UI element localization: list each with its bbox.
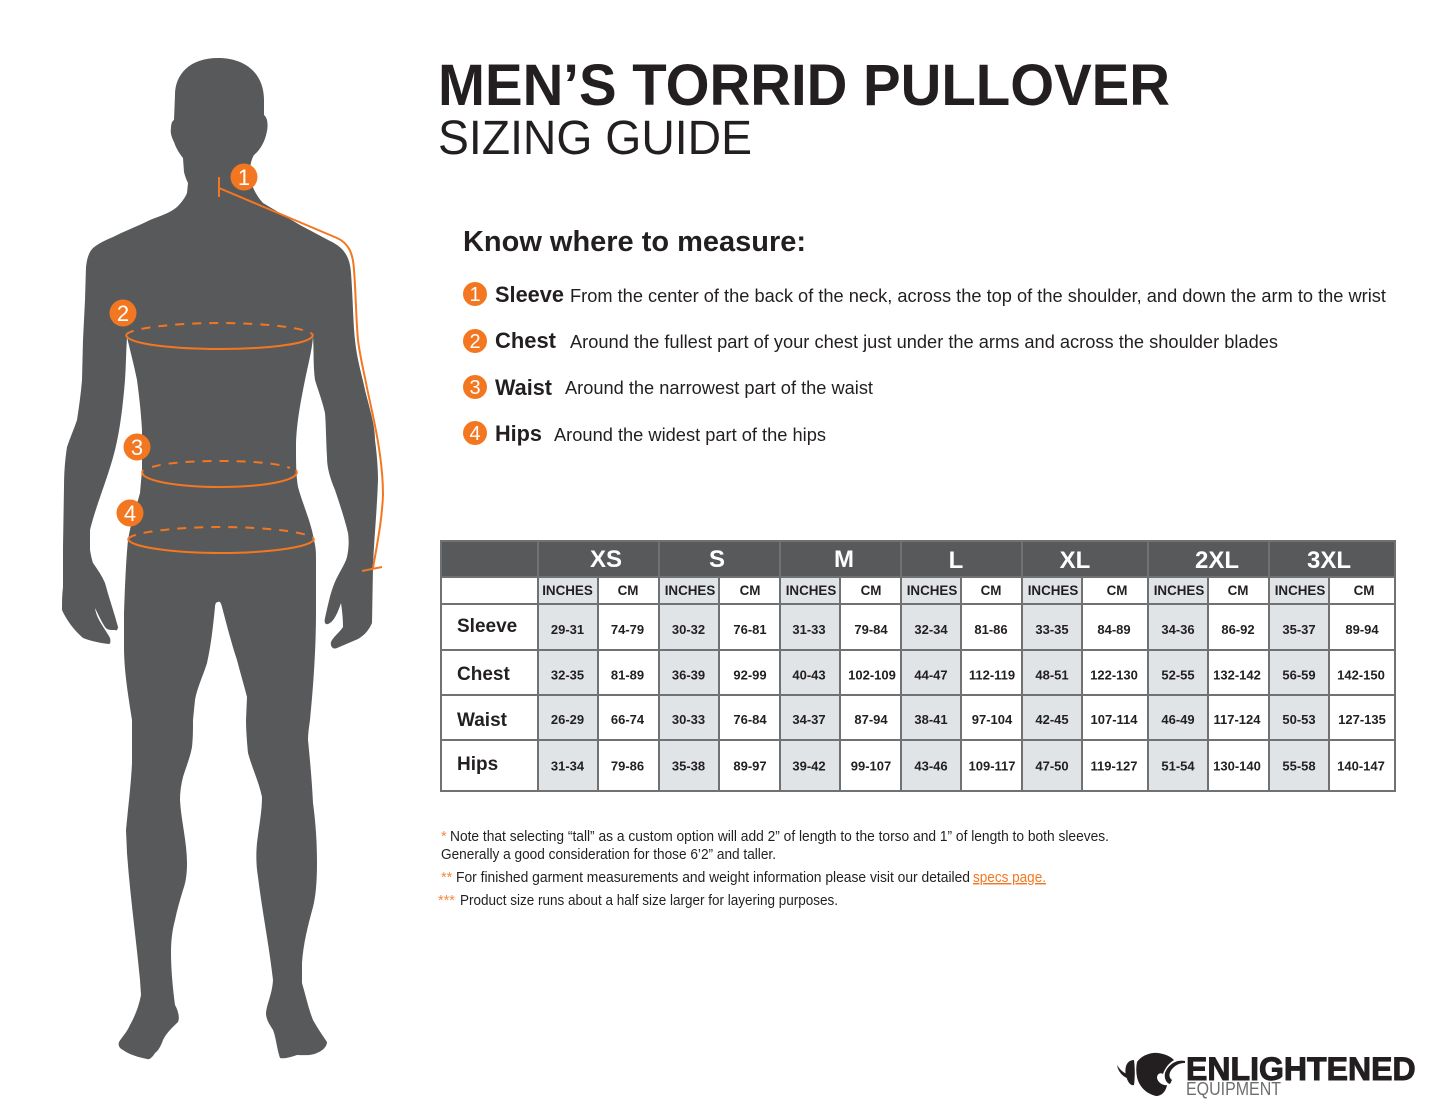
row: sleeve: 76-81 bbox=[733, 622, 767, 637]
size labels: L bbox=[949, 547, 963, 574]
row: sleeve: 86-92 bbox=[1221, 622, 1255, 637]
badge 4 on figure: 4 bbox=[124, 501, 136, 526]
row: hips: 43-46 bbox=[914, 758, 948, 774]
item: hips: 4 bbox=[469, 423, 481, 445]
row: hips: 89-97 bbox=[733, 758, 767, 774]
item: chest: 2 bbox=[469, 331, 481, 353]
badge 2 on figure: 2 bbox=[117, 301, 129, 326]
item: chest: Chest bbox=[495, 328, 556, 353]
item: sleeve: Sleeve bbox=[495, 282, 564, 307]
row: chest: 102-109 bbox=[848, 668, 896, 682]
footnote: product size: Product size runs about a half size larger for layering purposes. bbox=[460, 893, 838, 909]
row: sleeve: 31-33 bbox=[792, 622, 826, 637]
row: sleeve: 32-34 bbox=[914, 622, 948, 637]
row: chest: Chest bbox=[457, 664, 510, 685]
measurement line: chest bbox=[126, 323, 313, 349]
row: waist: 46-49 bbox=[1161, 712, 1195, 727]
row: hips bbox=[457, 754, 1385, 775]
row: sleeve: 81-86 bbox=[974, 622, 1008, 637]
measurement line: sleeve bbox=[219, 177, 383, 571]
footnote: tall option: Note that selecting “tall” as a custom option will add 2” of length to the torso and 1” of length to both sleeves. bbox=[450, 829, 1109, 845]
size labels: 2XL bbox=[1195, 547, 1239, 574]
row: sleeve: 89-94 bbox=[1345, 622, 1379, 637]
unit labels: INCHES bbox=[542, 583, 593, 598]
row: waist: 34-37 bbox=[792, 712, 826, 727]
size labels: XS bbox=[590, 546, 622, 573]
footnotes bbox=[438, 829, 1109, 909]
unit labels: INCHES bbox=[907, 583, 957, 598]
unit labels: INCHES bbox=[1275, 583, 1325, 598]
size chart table bbox=[440, 540, 1396, 791]
row: hips: 51-54 bbox=[1161, 758, 1195, 774]
unit labels: CM bbox=[1107, 583, 1127, 598]
size labels bbox=[590, 546, 1351, 574]
row: chest: 56-59 bbox=[1282, 668, 1316, 682]
row: chest: 142-150 bbox=[1337, 668, 1385, 682]
size labels: 3XL bbox=[1307, 547, 1351, 574]
item: waist: Waist bbox=[495, 375, 552, 400]
row: chest: 40-43 bbox=[792, 668, 826, 682]
footnote: specs page: ** bbox=[441, 870, 453, 886]
unit labels: CM bbox=[740, 583, 760, 598]
row: hips: 119-127 bbox=[1090, 758, 1138, 774]
size labels: M bbox=[834, 546, 854, 573]
row: hips: 31-34 bbox=[551, 758, 585, 774]
row: hips: 140-147 bbox=[1337, 758, 1385, 774]
item: chest: Around the fullest part of your chest just under the arms and across the shoulder blades bbox=[570, 331, 1278, 352]
row: waist: 76-84 bbox=[733, 712, 767, 727]
footnote: tall option: * bbox=[441, 829, 447, 845]
unit labels: INCHES bbox=[1028, 583, 1078, 598]
row: chest: 36-39 bbox=[672, 668, 705, 682]
row: chest: 52-55 bbox=[1161, 668, 1195, 682]
row: chest: 48-51 bbox=[1035, 668, 1069, 682]
badge 1 on figure: 1 bbox=[238, 165, 250, 190]
badge 3 on figure bbox=[124, 434, 150, 460]
row: hips: 35-38 bbox=[672, 758, 705, 774]
row: hips: 109-117 bbox=[968, 758, 1016, 774]
item: hips bbox=[463, 421, 826, 446]
row: waist: 38-41 bbox=[914, 712, 948, 727]
unit labels: CM bbox=[618, 583, 638, 598]
row: sleeve: Sleeve bbox=[457, 616, 517, 637]
footnote: specs page: specs page. bbox=[973, 870, 1046, 886]
item: waist: 3 bbox=[469, 377, 481, 399]
badge 3 on figure: 3 bbox=[131, 435, 143, 460]
row: sleeve: 29-31 bbox=[551, 622, 584, 637]
row: hips: 47-50 bbox=[1035, 758, 1069, 774]
logo: Enlightened Equipment bbox=[1117, 1051, 1416, 1099]
icon: bull head bbox=[1117, 1053, 1185, 1096]
row: waist bbox=[457, 710, 1386, 731]
row: hips: 130-140 bbox=[1213, 758, 1261, 774]
row: waist: 87-94 bbox=[854, 712, 888, 727]
row: waist: 97-104 bbox=[972, 712, 1013, 727]
row: chest: 81-89 bbox=[611, 668, 644, 682]
footnote: product size: *** bbox=[438, 893, 455, 909]
row: waist: 30-33 bbox=[672, 712, 705, 727]
row: sleeve: 34-36 bbox=[1161, 622, 1195, 637]
row: waist: 26-29 bbox=[551, 712, 584, 727]
badge 2 on figure bbox=[110, 300, 136, 326]
row: waist: 127-135 bbox=[1338, 712, 1386, 727]
item: waist bbox=[463, 375, 873, 400]
row: chest: 132-142 bbox=[1213, 668, 1261, 682]
measurement list bbox=[463, 282, 1386, 446]
body figure diagram bbox=[62, 58, 383, 1059]
row: sleeve: 84-89 bbox=[1097, 622, 1131, 637]
unit labels: INCHES bbox=[1154, 583, 1204, 598]
badge 1 on figure bbox=[230, 164, 258, 190]
row: chest: 92-99 bbox=[733, 668, 767, 682]
row: hips: 55-58 bbox=[1282, 758, 1316, 774]
row: hips: 39-42 bbox=[792, 758, 826, 774]
item: waist: Around the narrowest part of the waist bbox=[565, 377, 873, 398]
row: sleeve: 33-35 bbox=[1035, 622, 1069, 637]
row: sleeve: 79-84 bbox=[854, 622, 888, 637]
measurement line: waist bbox=[142, 461, 297, 487]
tagline: EQUIPMENT bbox=[1186, 1079, 1281, 1099]
footnote: tall option bbox=[441, 829, 1109, 863]
row: chest: 44-47 bbox=[914, 668, 948, 682]
size labels: XL bbox=[1060, 547, 1090, 574]
unit labels: CM bbox=[861, 583, 881, 598]
unit labels: INCHES bbox=[665, 583, 715, 598]
row: waist: 117-124 bbox=[1214, 712, 1261, 727]
row: hips: Hips bbox=[457, 754, 498, 775]
unit labels bbox=[542, 583, 1374, 598]
unit labels: CM bbox=[981, 583, 1001, 598]
item: hips: Around the widest part of the hips bbox=[554, 424, 826, 445]
row: sleeve: 74-79 bbox=[611, 622, 644, 637]
row: chest: 112-119 bbox=[969, 668, 1015, 682]
unit labels: INCHES bbox=[786, 583, 836, 598]
item: hips: Hips bbox=[495, 421, 542, 446]
badge 4 on figure bbox=[116, 500, 144, 526]
row: waist: Waist bbox=[457, 710, 508, 731]
subtitle: SIZING GUIDE bbox=[438, 112, 752, 165]
footnote: specs page: For finished garment measurements and weight information please visit our detailed bbox=[456, 870, 970, 886]
row: sleeve: 35-37 bbox=[1282, 622, 1316, 637]
table header bar bbox=[440, 540, 1396, 577]
item: sleeve: From the center of the back of the neck, across the top of the shoulder, and down the arm to the wrist bbox=[570, 285, 1386, 306]
silhouette of man bbox=[62, 58, 378, 1059]
row: sleeve bbox=[457, 616, 1379, 637]
row: chest bbox=[457, 664, 1385, 685]
item: sleeve: 1 bbox=[469, 284, 481, 306]
wordmark: ENLIGHTENED bbox=[1186, 1051, 1416, 1087]
row: hips: 99-107 bbox=[851, 758, 891, 774]
row: waist: 50-53 bbox=[1282, 712, 1316, 727]
row: chest: 32-35 bbox=[551, 668, 584, 682]
heading: know where to measure: Know where to measure: bbox=[463, 226, 806, 258]
measurement line: hips bbox=[128, 527, 314, 553]
inches column shading bbox=[538, 577, 1329, 791]
unit labels: CM bbox=[1228, 583, 1248, 598]
row: waist: 42-45 bbox=[1035, 712, 1069, 727]
row: chest: 122-130 bbox=[1090, 668, 1138, 682]
footnote: tall option: Generally a good consideration for those 6’2” and taller. bbox=[441, 847, 776, 863]
row: hips: 79-86 bbox=[611, 758, 644, 774]
row: waist: 66-74 bbox=[611, 712, 645, 727]
size labels: S bbox=[709, 546, 725, 573]
row: waist: 107-114 bbox=[1090, 712, 1138, 727]
unit labels: CM bbox=[1354, 583, 1374, 598]
row: sleeve: 30-32 bbox=[672, 622, 705, 637]
title: MEN’S TORRID PULLOVER bbox=[438, 53, 1170, 118]
